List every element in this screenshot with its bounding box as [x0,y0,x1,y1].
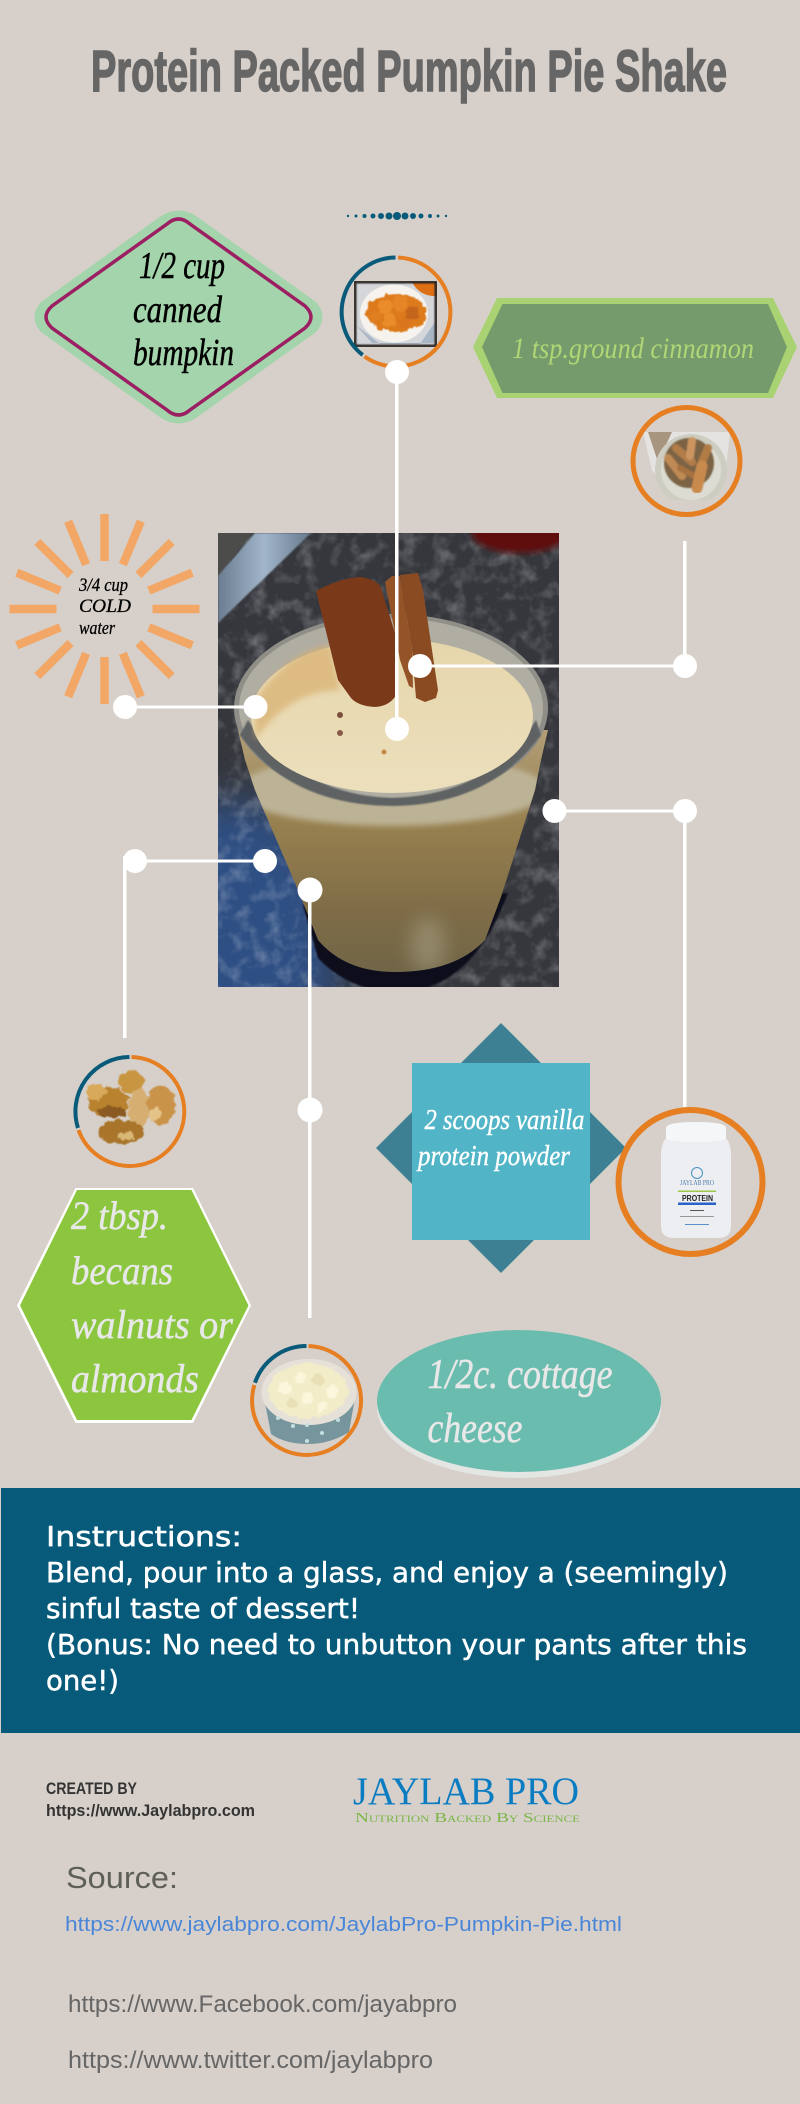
nuts amount text: almonds [71,1356,199,1401]
instructions text: Instructions: [46,1520,242,1553]
panel: pumpkin diamond [34,210,322,424]
instructions text [46,1520,747,1697]
pumpkin amount text: bumpkin [133,332,234,374]
pumpkin amount text: 1/2 cup [139,245,225,287]
nuts amount text: becans [71,1248,173,1293]
icon: cinnamon photo [643,432,730,506]
instructions text: one!) [46,1664,119,1697]
connector: pumpkin line [385,360,409,741]
facebook link: https://www.Facebook.com/jayabpro [68,1991,457,2018]
connector: cinnamon line [408,541,697,678]
panel: cottage cheese ellipse [377,1330,661,1478]
protein amount text: protein powder [416,1140,571,1172]
icon: cottage cheese ring [252,1346,361,1455]
connector: nuts line [123,849,277,1038]
twitter link: https://www.twitter.com/jaylabpro [68,2047,433,2074]
panel: cinnamon banner [473,298,797,398]
instructions text: (Bonus: No need to unbutton your pants after this [46,1628,747,1661]
icon: protein ring [618,1110,762,1254]
icon: pumpkin ring [342,258,450,366]
icon: protein tub [661,1122,731,1238]
icon: cottage cheese bowl [262,1359,356,1444]
nuts amount text: walnuts or [71,1302,233,1347]
water amount text [78,575,131,639]
connector: water line [113,695,268,719]
icon: protein tub: PROTEIN [682,1194,713,1203]
credit text: https://www.Jaylabpro.com [46,1801,255,1820]
icon: pumpkin bowl photo [354,281,437,347]
dotted ornament [347,212,447,220]
panel: nuts hexagon [17,1188,251,1423]
logo: Jaylab Pro: JAYLAB PRO [353,1770,579,1813]
instructions text: sinful taste of dessert! [46,1592,360,1625]
source heading: Source: [66,1860,178,1895]
protein amount text [416,1104,584,1172]
panel: instructions [1,1488,800,1733]
logo: Jaylab Pro: Nutrition Backed By Science [355,1810,581,1825]
nuts amount text [71,1193,233,1401]
credit text: CREATED BY [46,1779,138,1798]
water amount text: 3/4 cup [78,575,128,596]
water amount text: water [79,618,116,639]
connector: protein line [542,799,697,1107]
cottage cheese amount text [428,1352,612,1452]
icon: protein tub: JAYLAB PRO [680,1178,714,1187]
protein amount text: 2 scoops vanilla [424,1104,584,1136]
icon: walnut ring [75,1057,184,1166]
panel: protein powder card [376,1023,626,1273]
source link: https://www.jaylabpro.com/JaylabPro-Pumpkin-Pie.html [65,1913,622,1936]
instructions text: Blend, pour into a glass, and enjoy a (seemingly) [46,1556,728,1589]
cinnamon amount text: 1 tsp.ground cinnamon [512,332,754,365]
cottage cheese amount text: 1/2c. cottage [428,1352,612,1398]
pumpkin amount text: canned [133,289,223,331]
photo: pumpkin shake in glass [218,533,559,987]
pumpkin amount text [133,245,234,374]
credit text [46,1779,255,1820]
panel: water sunburst [10,514,200,704]
cottage cheese amount text: cheese [428,1406,522,1452]
connector: cottage cheese line [298,878,322,1318]
nuts amount text: 2 tbsp. [71,1193,168,1238]
icon: cinnamon ring [633,408,740,514]
icon: walnuts [86,1071,175,1144]
water amount text: COLD [79,596,131,617]
